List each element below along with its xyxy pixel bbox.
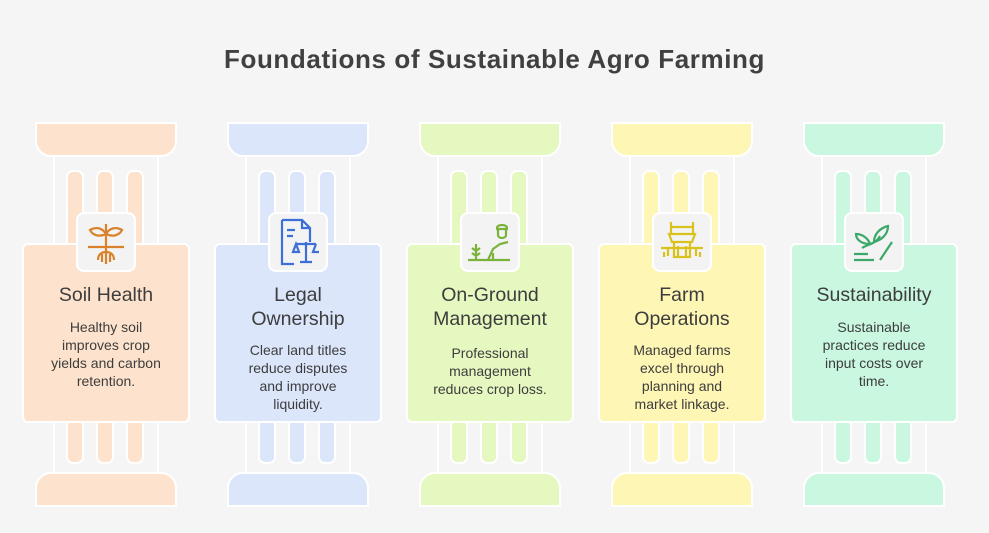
pillar: legal ownership: Legal	[274, 284, 322, 306]
pillar: sustainability	[790, 122, 958, 507]
pillar: farm operations	[598, 122, 766, 507]
icon: leaf growth	[844, 212, 904, 272]
pillar: soil health: Healthy soil improves crop yields and carbon retention.	[51, 319, 161, 389]
pillar: sustainability: Sustainability	[817, 284, 931, 306]
title: Foundations of Sustainable Agro Farming	[224, 44, 765, 74]
icon: farmer with plant	[460, 212, 520, 272]
pillar: on-ground management: Professional management reduces crop loss.	[433, 345, 547, 397]
pillar: soil health: Soil Health	[59, 284, 153, 306]
icon: document with scales	[268, 212, 328, 272]
pillar: sustainability: Sustainable practices reduce input costs over time.	[823, 319, 925, 389]
pillar: legal ownership	[214, 122, 382, 507]
icon: sprout	[76, 212, 136, 272]
pillar: legal ownership: Ownership	[251, 308, 345, 330]
pillar: soil health	[22, 122, 190, 507]
pillar: farm operations: Managed farms excel through planning and market linkage.	[633, 342, 731, 412]
icon: tractor	[652, 212, 712, 272]
pillar: on-ground management: Management	[433, 308, 547, 330]
pillar: on-ground management	[406, 122, 574, 507]
pillar: on-ground management: On-Ground	[441, 284, 539, 306]
pillar: legal ownership: Clear land titles reduce disputes and improve liquidity.	[249, 342, 347, 412]
pillar: farm operations: Farm	[659, 284, 705, 306]
pillar: farm operations: Operations	[634, 308, 730, 330]
